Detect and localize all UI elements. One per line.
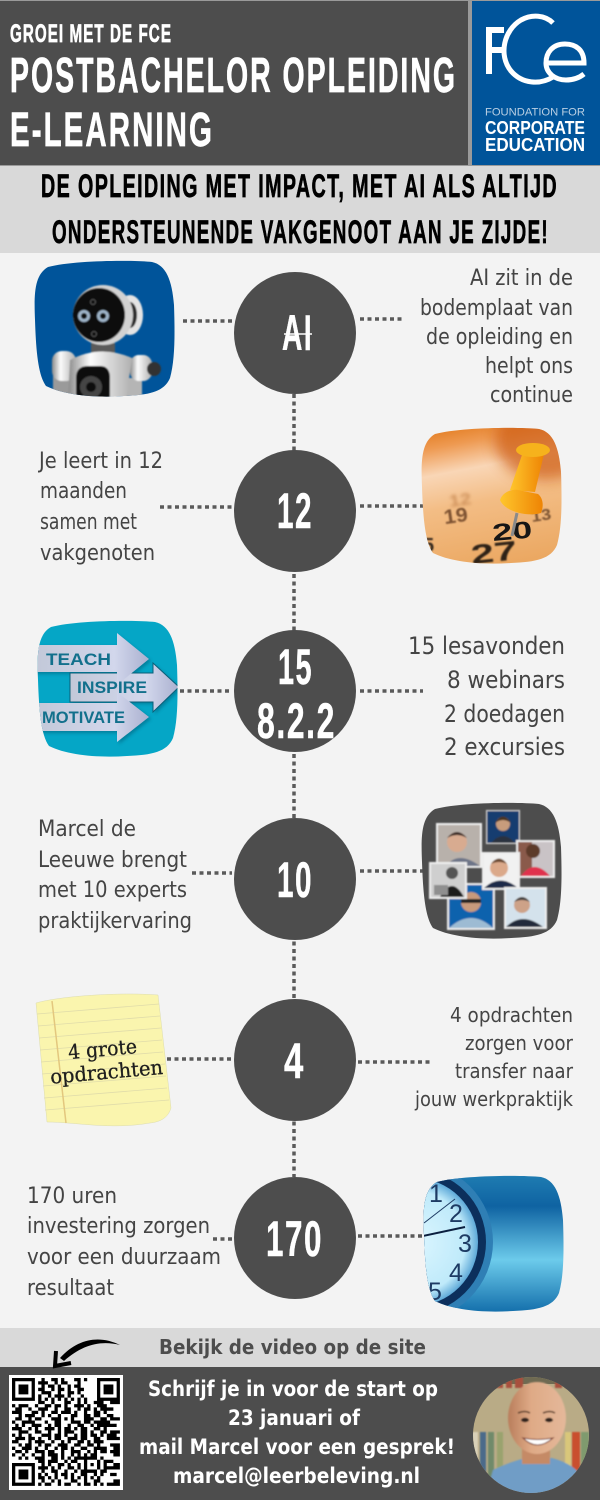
- text: AI: helpt ons: [485, 354, 573, 379]
- step AI: [30, 255, 573, 408]
- text: 15 8.2.2: 2 excursies: [444, 733, 565, 761]
- image: calendar with pin: 27: [469, 535, 518, 570]
- footer panel: [0, 1367, 600, 1500]
- number circle: 15 8.2.2: 8.2.2: [257, 693, 336, 749]
- image: calendar with pin: 5: [423, 535, 434, 557]
- image: clock: 2: [449, 1200, 463, 1228]
- number circle: 4: 4: [284, 1033, 305, 1089]
- FCE logo: CORPORATE: [485, 118, 585, 138]
- step 12: [38, 428, 562, 572]
- image: calendar with pin: 12: [448, 489, 472, 511]
- image: teach inspire motivate arrows: [38, 620, 178, 757]
- image: teach inspire motivate arrows: INSPIRE: [77, 678, 147, 697]
- number circle: 10: 10: [277, 852, 313, 908]
- footer text: [139, 1377, 455, 1489]
- text: 4: transfer naar: [455, 1059, 574, 1083]
- step 170: [28, 1176, 564, 1312]
- image: yellow note: [36, 994, 171, 1126]
- text: 4: 4 opdrachten: [450, 1003, 573, 1027]
- text: 4: [414, 1003, 574, 1111]
- text: 15 8.2.2: 8 webinars: [447, 666, 565, 694]
- FCE logo: EDUCATION: [485, 135, 585, 155]
- footer text: Schrijf je in voor de start op: [148, 1377, 438, 1402]
- video band: [0, 1328, 600, 1367]
- step 4: [36, 994, 574, 1126]
- text: 10: Marcel de: [38, 817, 136, 842]
- image: robot: [34, 260, 174, 397]
- text: AI: de opleiding en: [426, 325, 573, 350]
- image: experts photo collage: [422, 803, 562, 939]
- text: 15 8.2.2: [408, 632, 565, 761]
- image: yellow note: 4 grote: [67, 1034, 138, 1064]
- image: calendar with pin: 19: [442, 504, 469, 529]
- number circle: 15 8.2.2: [234, 630, 356, 752]
- FCE logo: [472, 1, 600, 165]
- footer text: marcel@leerbeleving.nl: [173, 1464, 420, 1489]
- image: clock: 5: [428, 1278, 442, 1306]
- text: 10: [38, 817, 192, 934]
- number circle: 12: 12: [277, 483, 313, 539]
- text: 170: resultaat: [27, 1276, 114, 1301]
- video band: Bekijk de video op de site: [159, 1335, 426, 1359]
- text: 4: jouw werkpraktijk: [414, 1087, 573, 1111]
- QR code: [9, 1375, 123, 1490]
- text: AI: [420, 266, 573, 408]
- text: AI: AI zit in de: [470, 266, 573, 291]
- number circle: 10: [234, 818, 356, 940]
- number circle: 4: [234, 999, 356, 1121]
- image: calendar with pin: 20: [491, 517, 533, 547]
- text: 4: zorgen voor: [465, 1031, 574, 1055]
- header: GROEI MET DE FCE: [10, 20, 172, 48]
- text: 170: voor een duurzaam: [27, 1245, 221, 1270]
- photo: Marcel: [470, 1375, 592, 1495]
- number circle: AI: AI: [282, 305, 313, 361]
- text: 15 8.2.2: 2 doedagen: [444, 700, 565, 728]
- text: 10: Leeuwe brengt: [38, 848, 187, 873]
- text: 10: praktijkervaring: [38, 909, 192, 934]
- text: 12: [37, 449, 163, 566]
- text: AI: continue: [490, 383, 573, 408]
- image: clock: 1: [429, 1180, 443, 1208]
- arrow to QR code: [55, 1339, 120, 1366]
- image: teach inspire motivate arrows: MOTIVATE: [42, 708, 125, 727]
- number circle: 15 8.2.2: 15: [278, 639, 313, 695]
- footer text: mail Marcel voor een gesprek!: [139, 1435, 455, 1460]
- text: 170: 170 uren: [27, 1184, 117, 1209]
- number circle: 12: [234, 450, 356, 572]
- text: 15 8.2.2: 15 lesavonden: [408, 632, 565, 660]
- image: yellow note: opdrachten: [49, 1055, 164, 1089]
- timeline dotted connectors: [160, 319, 430, 1239]
- step 15 8.2.2: [34, 616, 565, 761]
- subtitle band: [0, 166, 600, 253]
- text: AI: bodemplaat van: [420, 296, 573, 321]
- text: 10: met 10 experts: [38, 878, 187, 903]
- step 10: [38, 803, 562, 940]
- image: calendar with pin: [422, 428, 562, 564]
- text: 12: maanden: [40, 479, 127, 504]
- image: teach inspire motivate arrows: TEACH: [46, 650, 111, 669]
- text: 170: [27, 1184, 221, 1301]
- text: 12: Je leert in 12: [37, 449, 163, 474]
- text: 12: samen met: [40, 510, 137, 535]
- number circle: AI: [234, 272, 356, 394]
- text: 12: vakgenoten: [40, 541, 155, 566]
- footer text: 23 januari of: [228, 1406, 361, 1431]
- number circle: 170: [234, 1177, 356, 1299]
- header: E-LEARNING: [10, 104, 214, 157]
- number circle: 170: 170: [266, 1211, 323, 1267]
- image: clock: [424, 1176, 564, 1312]
- image: calendar with pin: 13: [530, 506, 552, 526]
- image: clock: 3: [458, 1230, 472, 1258]
- image: clock: 4: [449, 1259, 463, 1287]
- header: [0, 0, 600, 166]
- text: 170: investering zorgen: [27, 1214, 210, 1239]
- FCE logo: FOUNDATION FOR: [485, 106, 585, 118]
